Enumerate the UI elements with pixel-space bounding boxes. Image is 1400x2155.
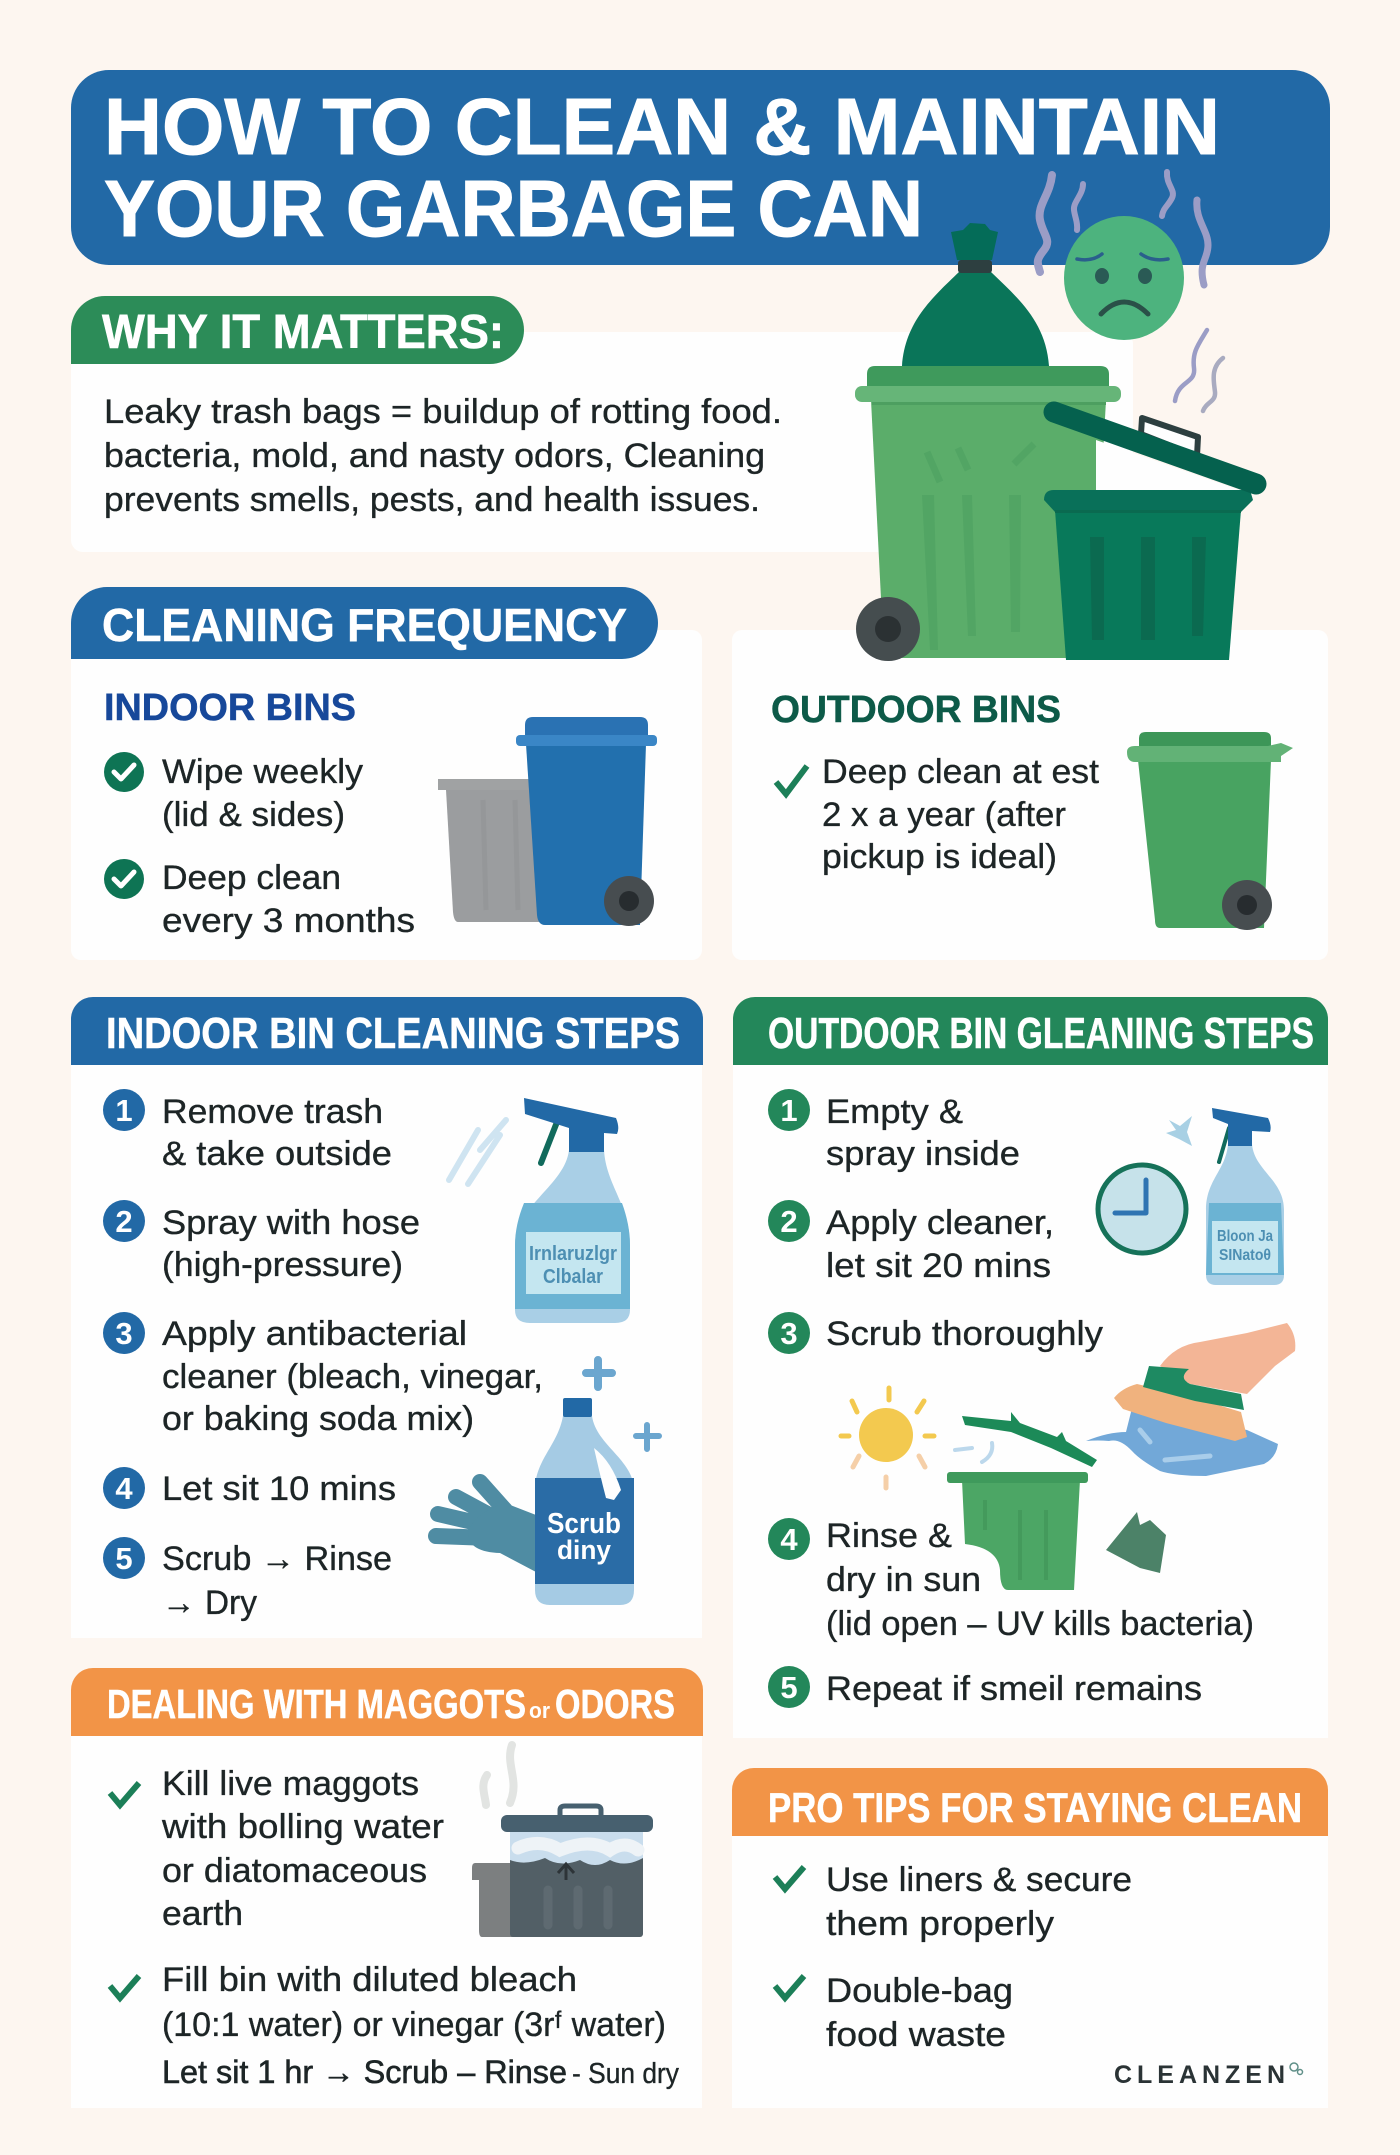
maggots item 2: Let sit 1 hr → Scrub – Rinse bbox=[162, 2054, 567, 2090]
heading: indoor bins: INDOOR BINS bbox=[104, 687, 356, 729]
header: indoor steps: INDOOR BIN CLEANING STEPS bbox=[106, 1009, 680, 1058]
icon: gray and blue indoor bins bbox=[438, 717, 657, 926]
tip 2 bbox=[826, 1972, 1013, 2054]
icon: sun bbox=[841, 1388, 934, 1488]
indoor item 2 bbox=[162, 859, 415, 940]
step 1: & take outside bbox=[162, 1135, 392, 1173]
step 2: 2 bbox=[780, 1204, 798, 1239]
indoor item 2: Deep clean bbox=[162, 859, 341, 897]
step 5 bbox=[103, 1537, 392, 1622]
step 5: Scrub → Rinse bbox=[162, 1540, 392, 1578]
hero illustration: overflowing bins and smell bbox=[855, 172, 1256, 661]
indoor item 1: Wipe weekly bbox=[162, 753, 363, 791]
step 4 bbox=[103, 1467, 396, 1509]
header: pro tips bbox=[732, 1768, 1328, 1836]
icon: hand scrubbing with brush bbox=[1086, 1323, 1295, 1476]
title bbox=[104, 82, 1220, 253]
icon: spray bottle: Irnlaruzlgr bbox=[529, 1243, 617, 1265]
outdoor item: 2 x a year (after bbox=[822, 796, 1066, 834]
step 5: 5 bbox=[780, 1670, 798, 1705]
step 1: spray inside bbox=[826, 1135, 1020, 1173]
icon: bleach bottle: diny bbox=[557, 1535, 611, 1565]
why it matters text: prevents smells, pests, and health issues. bbox=[104, 481, 760, 519]
indoor item 2: every 3 months bbox=[162, 902, 415, 940]
indoor item 1 bbox=[162, 753, 363, 834]
icon: check circle 2 bbox=[104, 859, 144, 899]
maggots item 1: Kill live maggots bbox=[162, 1765, 419, 1803]
indoor item 1: (lid & sides) bbox=[162, 796, 345, 834]
step 4: (lid open – UV kills bacteria) bbox=[826, 1605, 1254, 1643]
panel: dealing with maggots or odors bbox=[71, 1668, 703, 2108]
icon: bleach bottle: Scrub bbox=[547, 1508, 621, 1540]
icon: rag bbox=[1106, 1512, 1166, 1573]
icon: steaming bin bbox=[472, 1745, 653, 1937]
icon: big green bin bbox=[855, 366, 1121, 661]
maggots item 2: - Sun dry bbox=[572, 2058, 679, 2090]
title banner bbox=[71, 70, 1330, 265]
icon: check bbox=[110, 1783, 139, 1805]
step 5: → Dry bbox=[162, 1584, 257, 1622]
step 3: 3 bbox=[115, 1316, 133, 1351]
step 2: 2 bbox=[115, 1204, 133, 1239]
tip 2: Double-bag bbox=[826, 1972, 1013, 2010]
step 4: Let sit 10 mins bbox=[162, 1470, 396, 1508]
maggots item 1 bbox=[161, 1765, 444, 1933]
tip 1: them properly bbox=[826, 1905, 1054, 1943]
step 3: 3 bbox=[780, 1316, 798, 1351]
icon: garbage bag bbox=[902, 223, 1049, 366]
icon: check bbox=[110, 1976, 139, 1998]
header: pro tips: PRO TIPS FOR STAYING CLEAN bbox=[768, 1784, 1302, 1831]
step 2 bbox=[103, 1200, 420, 1284]
badge: cleaning frequency: CLEANING FREQUENCY bbox=[102, 599, 627, 651]
icon: stink lines bbox=[1038, 172, 1223, 411]
step 1: 1 bbox=[115, 1093, 133, 1128]
panel: indoor bins frequency bbox=[71, 587, 702, 960]
outdoor item: pickup is ideal) bbox=[822, 838, 1057, 876]
step 2: Spray with hose bbox=[162, 1204, 420, 1242]
step 3: Scrub thoroughly bbox=[826, 1315, 1103, 1353]
icon: small spray bottle: Bloon Ja bbox=[1217, 1228, 1273, 1245]
icon: check bbox=[775, 1976, 804, 1998]
title: HOW TO CLEAN & MAINTAIN bbox=[104, 82, 1220, 171]
title: YOUR GARBAGE CAN bbox=[104, 164, 923, 253]
maggots item 1: earth bbox=[162, 1895, 243, 1933]
step 4: 4 bbox=[780, 1522, 798, 1557]
icon: spray bottle bbox=[449, 1098, 630, 1323]
header: outdoor steps bbox=[733, 997, 1328, 1065]
icon: check bbox=[776, 766, 807, 794]
icon: sad green face bbox=[1064, 216, 1184, 340]
why it matters text bbox=[104, 393, 782, 519]
icon: check bbox=[775, 1867, 804, 1889]
outdoor item: Deep clean at est bbox=[822, 753, 1100, 791]
step 5: Repeat if smeil remains bbox=[826, 1670, 1202, 1708]
step 3 bbox=[103, 1312, 543, 1438]
step 4: Rinse & bbox=[826, 1517, 952, 1555]
tip 1 bbox=[826, 1861, 1132, 1943]
icon: spray bottle: Clbalar bbox=[543, 1266, 603, 1288]
step 5: 5 bbox=[115, 1541, 133, 1576]
tip 1: Use liners & secure bbox=[826, 1861, 1132, 1899]
step 4: 4 bbox=[115, 1471, 133, 1506]
header: maggots: or bbox=[529, 1698, 550, 1723]
brand: cleanzen: CLEANZEN bbox=[1114, 2061, 1285, 2089]
header: maggots bbox=[71, 1668, 703, 1736]
step 3 bbox=[768, 1312, 1103, 1354]
step 2 bbox=[768, 1200, 1054, 1285]
header: maggots: ODORS bbox=[555, 1681, 675, 1727]
step 1: Empty & bbox=[826, 1093, 963, 1131]
icon: rubber glove bbox=[436, 1482, 536, 1572]
icon: small spray bottle bbox=[1166, 1108, 1284, 1285]
step 1 bbox=[768, 1089, 1020, 1173]
why it matters text: bacteria, mold, and nasty odors, Cleaning bbox=[104, 437, 765, 475]
step 4 bbox=[768, 1517, 1254, 1643]
header: maggots: DEALING WITH MAGGOTS bbox=[107, 1681, 526, 1727]
panel: indoor bin cleaning steps bbox=[71, 997, 703, 1638]
step 1: 1 bbox=[780, 1093, 798, 1128]
step 2: let sit 20 mins bbox=[826, 1247, 1051, 1285]
icon: green outdoor bin bbox=[1127, 732, 1293, 930]
icon: small green bin with lid bbox=[947, 1412, 1097, 1590]
icon: bleach bottle bbox=[535, 1398, 634, 1605]
step 3: or baking soda mix) bbox=[162, 1400, 474, 1438]
maggots item 1: with bolling water bbox=[161, 1808, 444, 1846]
badge: why it matters: WHY IT MATTERS: bbox=[102, 306, 504, 359]
header: indoor steps bbox=[71, 997, 703, 1065]
step 2: (high-pressure) bbox=[162, 1246, 403, 1284]
step 3: Apply antibacterial bbox=[162, 1315, 467, 1353]
icon: clock bbox=[1098, 1165, 1186, 1253]
icon: sparkles bbox=[586, 1360, 659, 1449]
panel: outdoor bin cleaning steps bbox=[733, 997, 1328, 1738]
badge: cleaning frequency bbox=[71, 587, 658, 659]
icon: check circle 1 bbox=[104, 752, 144, 792]
step 2: Apply cleaner, bbox=[826, 1204, 1054, 1242]
step 1 bbox=[103, 1089, 392, 1173]
step 4: dry in sun bbox=[826, 1561, 981, 1599]
step 1: Remove trash bbox=[162, 1093, 383, 1131]
panel: why it matters bbox=[71, 296, 1133, 552]
heading: outdoor bins: OUTDOOR BINS bbox=[771, 689, 1061, 731]
maggots item 2: Fill bin with diluted bleach bbox=[162, 1961, 577, 1999]
maggots item 2: (10:1 water) or vinegar (3rᶠ water) bbox=[162, 2006, 666, 2044]
panel: outdoor bins frequency bbox=[732, 630, 1328, 960]
maggots item 1: or diatomaceous bbox=[162, 1852, 427, 1890]
maggots item 2 bbox=[162, 1961, 679, 2090]
icon: small spray bottle: SINatoθ bbox=[1219, 1247, 1271, 1264]
panel: pro tips bbox=[732, 1768, 1328, 2108]
step 3: cleaner (bleach, vinegar, bbox=[162, 1358, 543, 1396]
icon: dark green bin with open lid bbox=[1044, 412, 1256, 660]
tip 2: food waste bbox=[826, 2016, 1006, 2054]
why it matters text: Leaky trash bags = buildup of rotting food. bbox=[104, 393, 782, 431]
outdoor item bbox=[822, 753, 1100, 876]
